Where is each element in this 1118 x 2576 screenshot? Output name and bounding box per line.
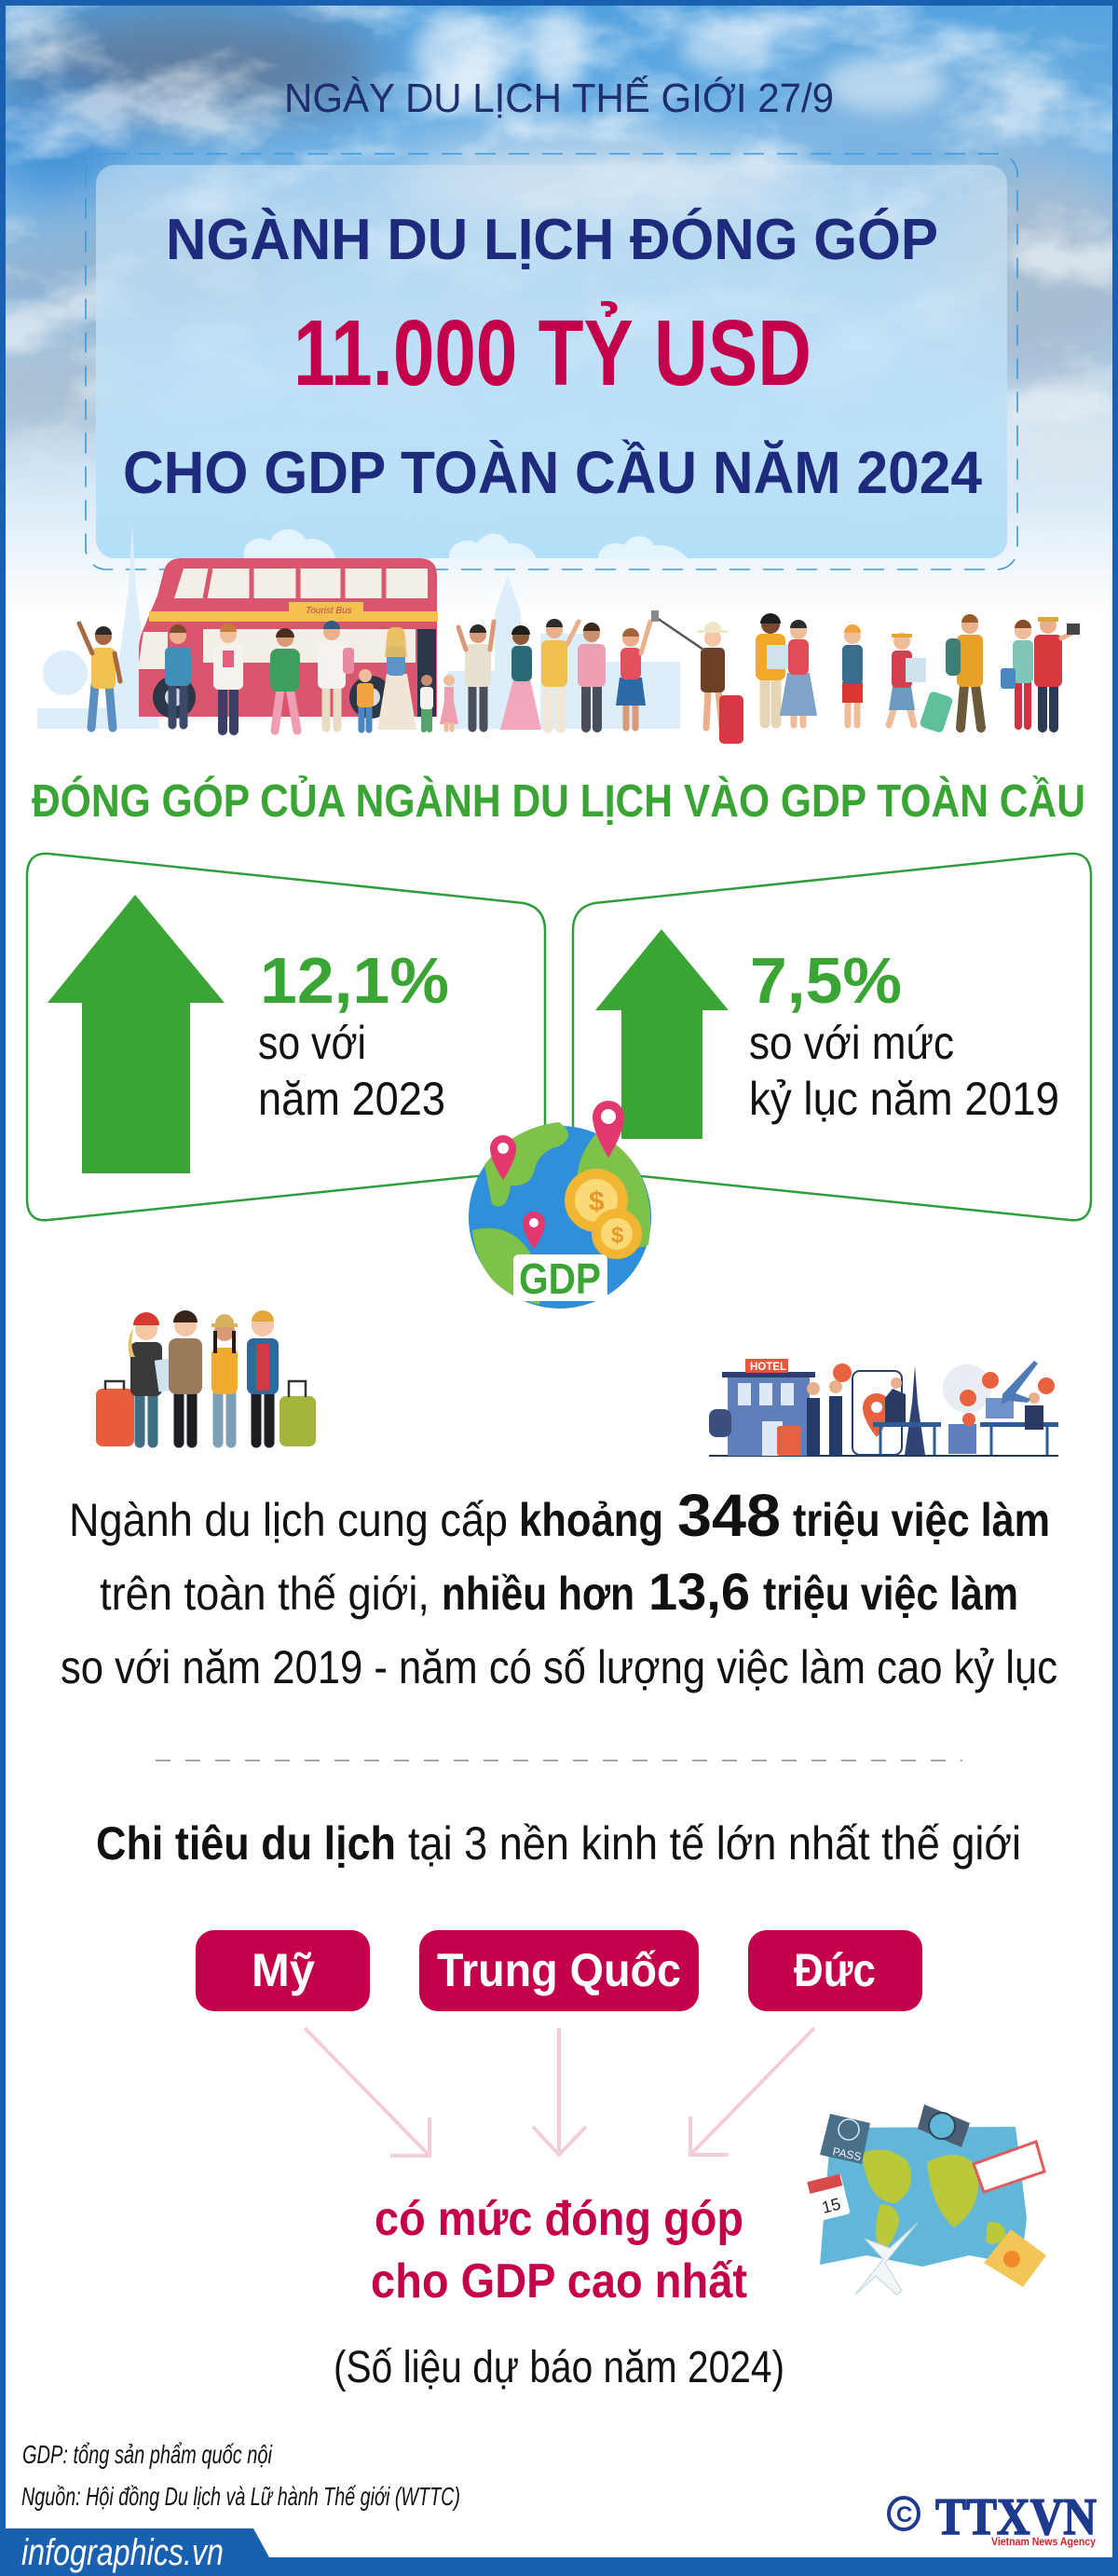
tourist 7 xyxy=(458,622,494,728)
label kỷ lục năm 2019: kỷ lục năm 2019 xyxy=(749,1073,1059,1125)
conclusion text: cho GDP cao nhất xyxy=(371,2254,747,2309)
illustration: hotel and online booking xyxy=(709,1359,1058,1457)
tourist 18 xyxy=(1001,620,1033,726)
icon: GDP globe xyxy=(469,1101,651,1309)
arrow: Đức to text xyxy=(690,2028,814,2155)
arrow: Trung Quốc to text xyxy=(533,2028,586,2155)
arrow: Mỹ to text xyxy=(305,2028,429,2156)
illustration: travel map: PASS xyxy=(831,2144,863,2163)
tourist 8 xyxy=(500,625,541,730)
tourist 11 xyxy=(616,622,650,728)
source note: GDP: tổng sản phẩm quốc nội xyxy=(22,2440,273,2469)
conclusion text xyxy=(371,2192,747,2309)
paragraph: jobs: 13,6 xyxy=(648,1562,750,1621)
subheading: spending xyxy=(96,1817,1021,1870)
logo: TTXVN xyxy=(889,2488,1097,2548)
logo: TTXVN: C xyxy=(896,2502,912,2528)
icon: GDP globe: $ xyxy=(589,1186,605,1217)
child 3 xyxy=(440,675,458,730)
button: Mỹ: Mỹ xyxy=(252,1944,315,1996)
tourist 4 xyxy=(270,628,300,731)
tourist 10 xyxy=(578,623,606,728)
button: Đức: Đức xyxy=(794,1944,876,1996)
illustration: tourist bus xyxy=(138,558,438,719)
illustration: travel map: 15 xyxy=(820,2195,842,2217)
button: Trung Quốc xyxy=(419,1930,699,2011)
value 12,1%: 12,1% xyxy=(260,944,449,1017)
headline line 1: NGÀNH DU LỊCH ĐÓNG GÓP xyxy=(166,208,938,272)
logo: TTXVN: Vietnam News Agency xyxy=(991,2535,1096,2548)
label so với: so với xyxy=(258,1017,366,1069)
tourist 16 xyxy=(889,633,926,725)
tourist 6 xyxy=(377,627,416,730)
child 2 xyxy=(420,675,433,730)
icon: GDP globe: $ xyxy=(611,1223,624,1248)
panel: growth vs 2019 xyxy=(573,854,1091,1220)
panel: headline xyxy=(86,154,1017,569)
illustration: tourists row xyxy=(79,610,1080,744)
tourist 14 xyxy=(780,620,817,725)
tourist 5 xyxy=(318,621,354,728)
button: Đức xyxy=(748,1930,922,2011)
tourist 12 with selfie stick xyxy=(651,610,728,728)
subheading: spending: tại 3 nền kinh tế lớn nhất thế giới xyxy=(408,1817,1021,1870)
skyline backdrop xyxy=(37,524,680,729)
tourist 3 xyxy=(213,623,243,731)
tourist 17 xyxy=(946,614,983,728)
subheading: spending: Chi tiêu du lịch xyxy=(96,1817,396,1870)
child 1 xyxy=(357,669,374,730)
conclusion text: có mức đóng góp xyxy=(375,2192,743,2246)
headline line 3: CHO GDP TOÀN CẦU NĂM 2024 xyxy=(123,439,982,506)
sky background with clouds xyxy=(0,0,1118,615)
tourist 1 xyxy=(79,623,120,728)
green suitcase xyxy=(919,691,954,733)
illustration: travel map xyxy=(807,2104,1046,2295)
arrow up left xyxy=(48,895,225,1173)
map pins xyxy=(490,1101,624,1249)
button: Mỹ xyxy=(196,1930,370,2011)
value 7,5%: 7,5% xyxy=(750,944,902,1017)
illustration: hotel and online booking: HOTEL xyxy=(750,1362,786,1373)
tourist 19 xyxy=(1034,617,1080,728)
icon: GDP globe: GDP xyxy=(519,1254,601,1303)
tourist 13 xyxy=(756,613,791,723)
paragraph: jobs: nhiều hơn xyxy=(442,1568,634,1620)
tourist 2 xyxy=(165,624,191,725)
logo: TTXVN: TTXVN xyxy=(935,2488,1097,2546)
arrow up right xyxy=(595,929,729,1139)
headline amount: 11.000 TỶ USD xyxy=(293,301,811,405)
paragraph: jobs xyxy=(61,1482,1057,1693)
source note xyxy=(21,2440,460,2511)
illustration: tourist bus: Tourist Bus xyxy=(306,606,352,616)
forecast note: (Số liệu dự báo năm 2024) xyxy=(334,2343,784,2392)
paragraph: jobs: triệu việc làm xyxy=(793,1494,1050,1546)
paragraph: jobs: 348 xyxy=(677,1482,781,1549)
panel clouds xyxy=(243,529,688,558)
footer bar xyxy=(0,2528,1118,2576)
paragraph: jobs: Ngành du lịch cung cấp xyxy=(69,1494,508,1546)
tourist 15 xyxy=(842,624,863,725)
paragraph: jobs: trên toàn thế giới, xyxy=(100,1568,429,1620)
panel: growth vs 2023 xyxy=(27,854,545,1220)
paragraph: jobs: khoảng xyxy=(519,1494,663,1546)
illustration: four young travellers xyxy=(96,1310,316,1446)
source note: Nguồn: Hội đồng Du lịch và Lữ hành Thế giới (WTTC) xyxy=(21,2482,460,2511)
red suitcase xyxy=(719,695,743,744)
footer bar: infographics.vn xyxy=(21,2532,224,2573)
paragraph: jobs: triệu việc làm xyxy=(763,1568,1018,1620)
button: Trung Quốc: Trung Quốc xyxy=(437,1944,681,1996)
supertitle: NGÀY DU LỊCH THẾ GIỚI 27/9 xyxy=(284,75,834,121)
label so với mức: so với mức xyxy=(749,1017,954,1069)
tourist 9 xyxy=(541,619,579,728)
label năm 2023: năm 2023 xyxy=(258,1073,445,1125)
